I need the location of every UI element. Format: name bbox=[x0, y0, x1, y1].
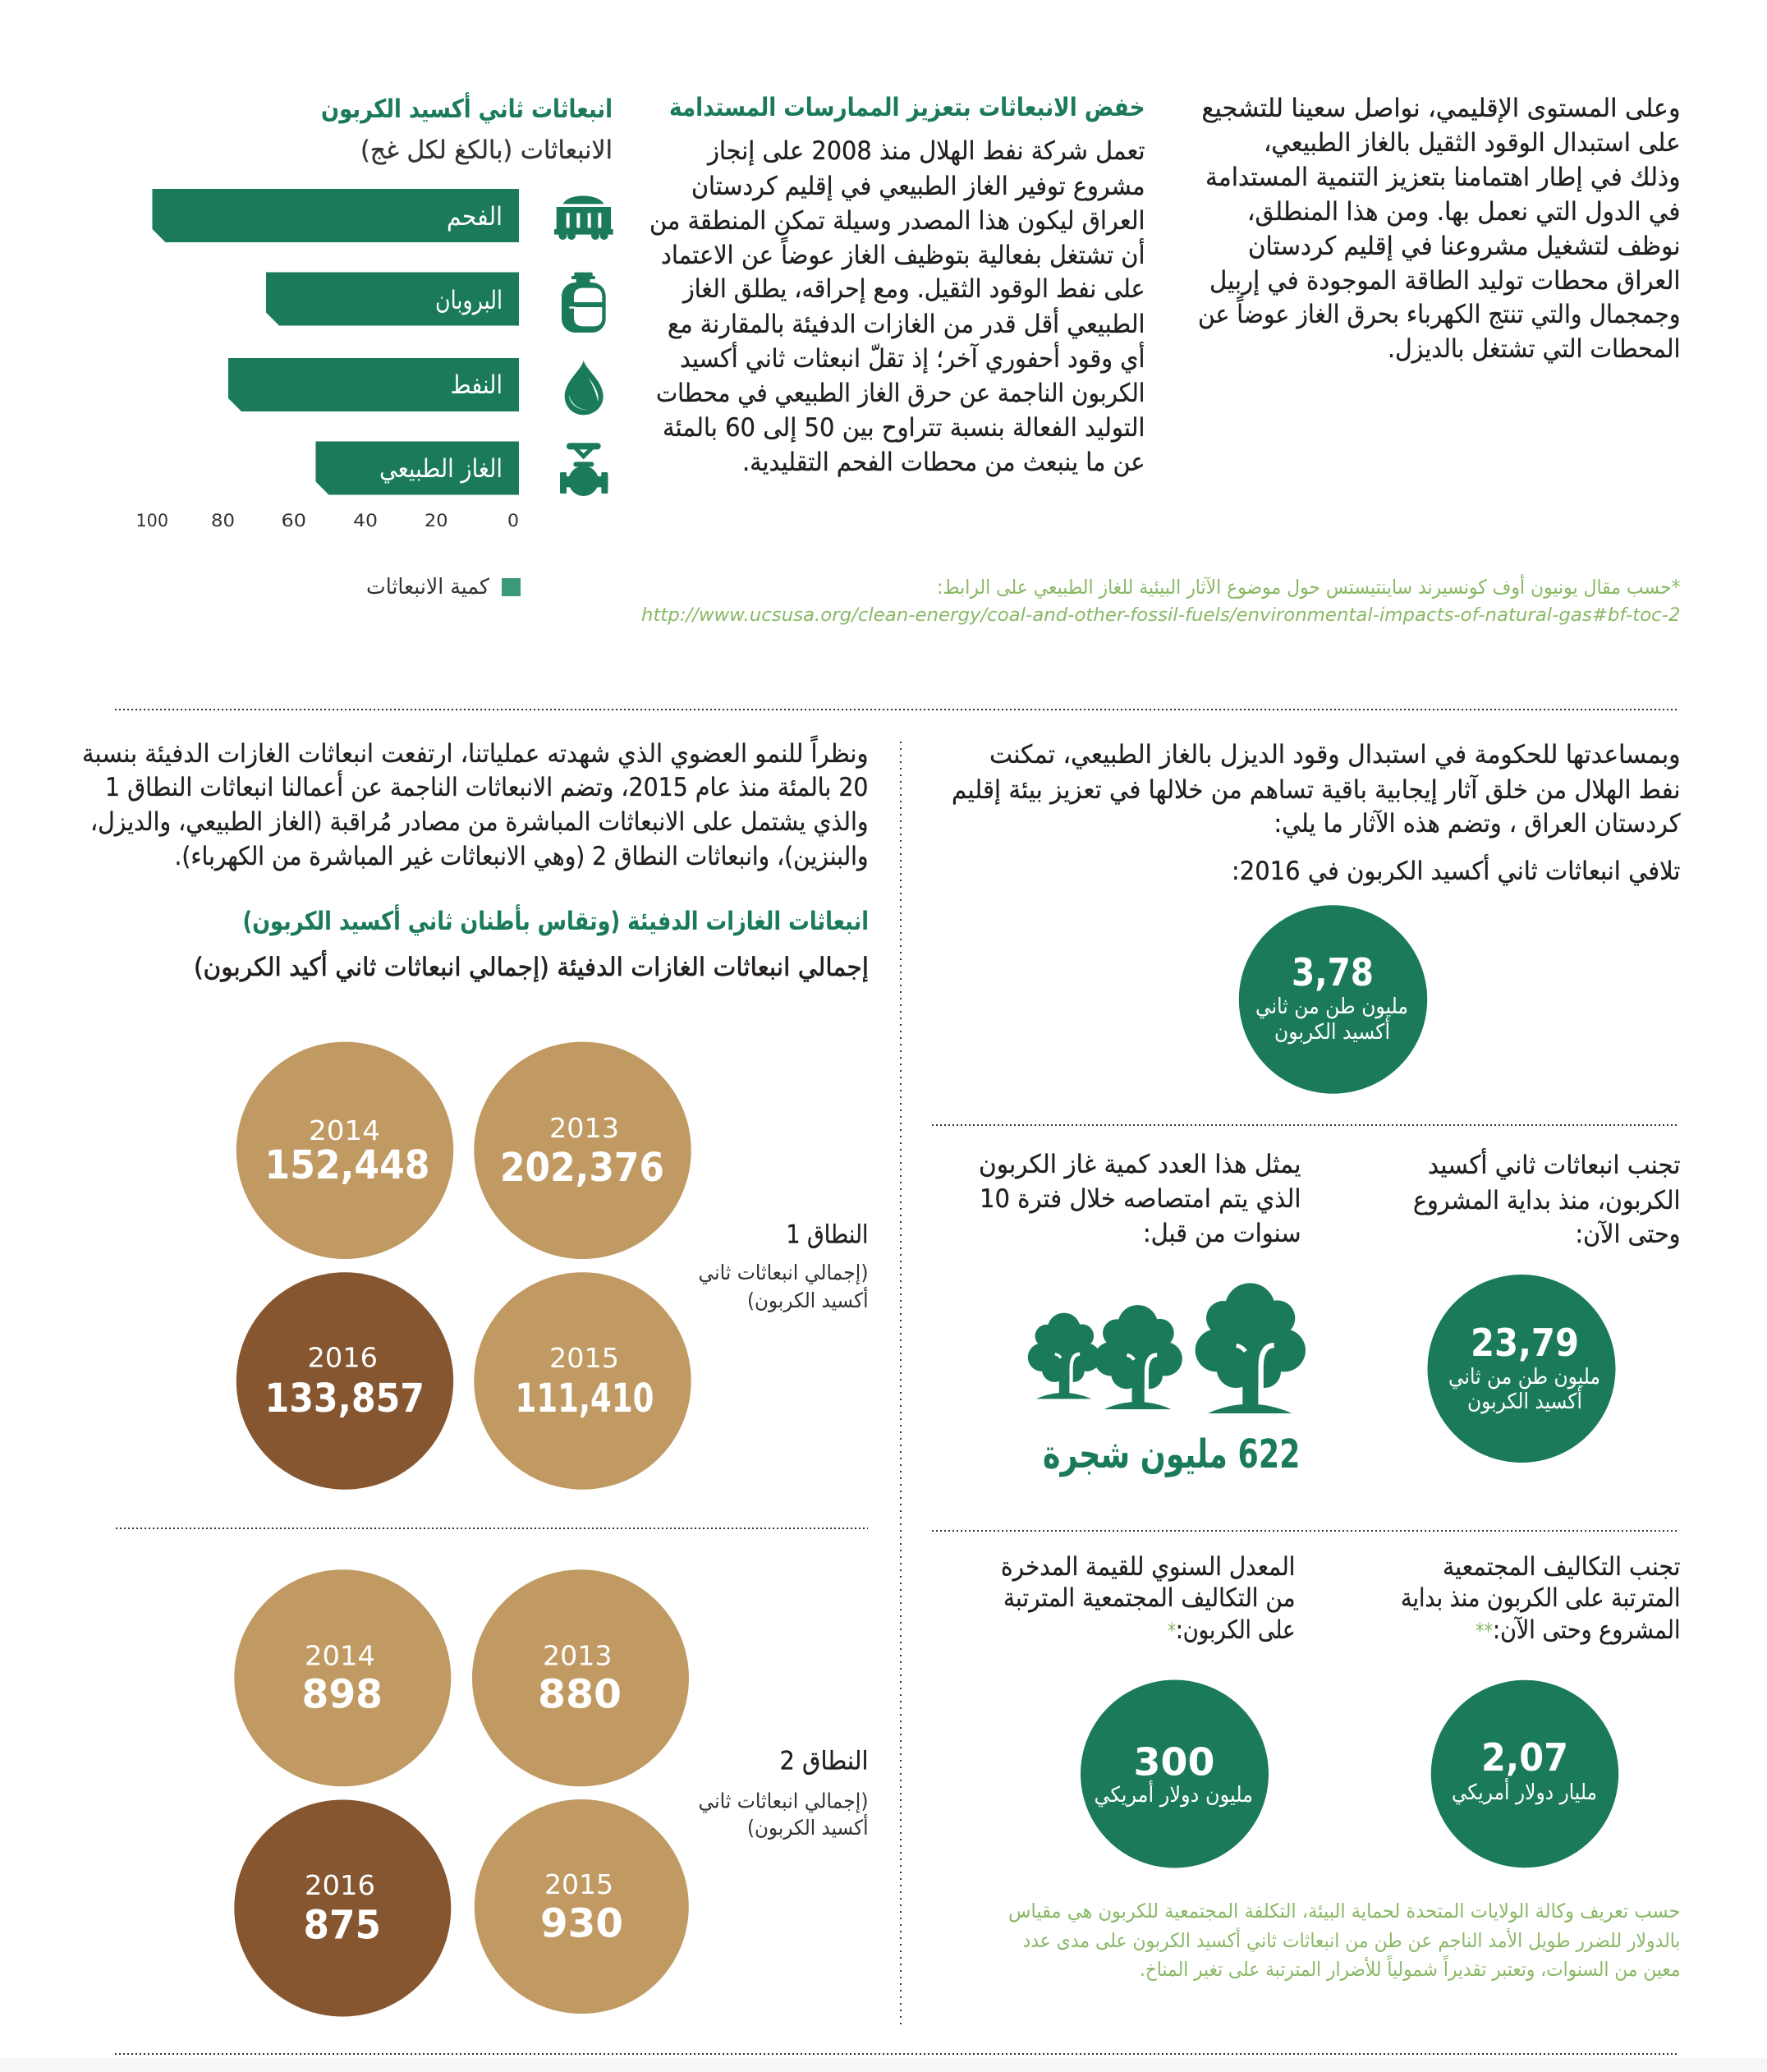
stat circle: 2.07: 2,07 bbox=[1481, 1735, 1568, 1780]
circle: 2014 scope 1: 2014 bbox=[309, 1114, 380, 1146]
text block: avoided social cost: المترتبة على الكربون منذ بداية bbox=[1401, 1583, 1680, 1613]
circle: 2013 scope 1: 202,376 bbox=[500, 1145, 664, 1191]
text block: avoided social cost: ** bbox=[1476, 1619, 1493, 1644]
axis labels bbox=[136, 511, 519, 531]
icon: propane tank bbox=[562, 273, 606, 333]
text block: intro to positive impacts: تلافي انبعاثات ثاني أكسيد الكربون في 2016: bbox=[1232, 854, 1681, 886]
text block: organic growth paragraph: 20 بالمئة منذ عام 2015، وتضم الانبعاثات الناجمة عن أعمالنا انبعاثات النطاق 1 bbox=[105, 770, 869, 802]
bar: oil: النفط bbox=[450, 370, 503, 400]
axis labels: 80 bbox=[211, 511, 235, 531]
text block: tree equivalence: يمثل هذا العدد كمية غاز الكربون bbox=[979, 1150, 1301, 1179]
text block: natural gas project paragraph bbox=[649, 136, 1145, 477]
subheading: total emissions: إجمالي انبعاثات الغازات الدفيئة (إجمالي انبعاثات ثاني أكيد الكربون) bbox=[194, 950, 869, 982]
text block: avoided social cost: تجنب التكاليف المجتمعية bbox=[1443, 1552, 1680, 1582]
stat circle: 3.78: أكسيد الكربون bbox=[1274, 1017, 1390, 1045]
bar: coal: الفحم bbox=[447, 202, 503, 232]
text block: regional paragraph: وجمجمال والتي تنتج الكهرباء بحرق الغاز عوضاً عن bbox=[1198, 296, 1680, 329]
text block: natural gas project paragraph: أن تشتغل بفعالية بتوظيف الغاز عوضاً عن الاعتماد bbox=[661, 237, 1145, 270]
text block: natural gas project paragraph: العراق ليكون هذا المصدر وسيلة تمكن المنطقة من bbox=[649, 206, 1145, 236]
text block: natural gas project paragraph: على نفط الوقود الثقيل. ومع إحراقه، يطلق الغاز bbox=[682, 274, 1145, 304]
circle: 2014 scope 2: 898 bbox=[302, 1672, 383, 1718]
circle: 2013 scope 2: 880 bbox=[538, 1672, 622, 1718]
text block: avoided CO2 since start: الكربون، منذ بداية المشروع bbox=[1413, 1186, 1680, 1215]
label: scope 2: (إجمالي انبعاثات ثاني bbox=[698, 1789, 869, 1813]
text block: organic growth paragraph: والذي يشتمل على الانبعاثات المباشرة من مصادر مُراقبة (الغاز الطبيعي، والديزل، bbox=[90, 807, 869, 837]
icon: trees bbox=[1028, 1283, 1306, 1413]
text block: regional paragraph: العراق محطات توليد الطاقة الموجودة في إربيل bbox=[1209, 266, 1680, 296]
text block: natural gas project paragraph: تعمل شركة نفط الهلال منذ 2008 على إنجاز bbox=[706, 136, 1145, 166]
stat circle: 23.79: مليون طن من ثاني bbox=[1448, 1365, 1600, 1390]
footnote: social cost definition bbox=[1008, 1900, 1680, 1981]
icon: gas valve bbox=[560, 443, 608, 496]
circle: 2014 scope 1 bbox=[236, 1042, 453, 1259]
text block: avoided CO2 since start: تجنب انبعاثات ثاني أكسيد bbox=[1428, 1148, 1680, 1180]
text block: annual social cost saving: على الكربون: bbox=[1176, 1615, 1296, 1645]
circle: 2016 scope 2 bbox=[234, 1800, 451, 2017]
text block: natural gas project paragraph: أي وقود أحفوري آخر؛ إذ تقلّ انبعثات ثاني أكسيد bbox=[680, 342, 1145, 374]
circle: 2016 scope 1: 2016 bbox=[307, 1342, 378, 1373]
stat circle: 300: مليون دولار أمريكي bbox=[1094, 1780, 1253, 1808]
icon: oil drop bbox=[565, 360, 604, 415]
circle: 2013 scope 2: 2013 bbox=[543, 1639, 613, 1672]
text block: intro to positive impacts: نفط الهلال من خلق آثار إيجابية باقية تساهم من خلالها في تعزيز بيئة إقليم bbox=[952, 774, 1680, 805]
stat circle: 300 bbox=[1081, 1680, 1269, 1868]
stat circle: 2.07 bbox=[1431, 1680, 1618, 1868]
stat: 622 million trees: 622 مليون شجرة bbox=[1043, 1431, 1301, 1477]
text block: regional paragraph: في الدول التي نعمل بها. ومن هذا المنطلق، bbox=[1247, 197, 1680, 227]
bar: natural gas: الغاز الطبيعي bbox=[379, 454, 503, 484]
icon: coal cart bbox=[554, 195, 613, 240]
text block: natural gas project paragraph: الطبيعي أقل قدر من الغازات الدفيئة بالمقارنة مع bbox=[668, 307, 1145, 339]
text block: avoided CO2 since start bbox=[1413, 1148, 1680, 1249]
circle: 2016 scope 2: 875 bbox=[304, 1902, 381, 1948]
axis labels: 100 bbox=[136, 511, 168, 531]
panel: scope 2 circles bbox=[234, 1569, 689, 2017]
text block: regional paragraph: نوظف لتشغيل مشروعنا في إقليم كردستان bbox=[1248, 232, 1680, 261]
label: scope 2 bbox=[698, 1746, 869, 1840]
text block: organic growth paragraph bbox=[82, 735, 869, 871]
footnote: source link bbox=[641, 574, 1680, 626]
circle: 2015 scope 1 bbox=[474, 1272, 691, 1490]
legend: كمية الانبعاثات bbox=[366, 575, 490, 600]
text block: intro to positive impacts bbox=[952, 740, 1681, 886]
heading: CO2 emissions chart bbox=[321, 92, 613, 165]
circle: 2016 scope 1: 133,857 bbox=[264, 1376, 425, 1422]
stat circle: 23.79 bbox=[1427, 1275, 1616, 1463]
text block: organic growth paragraph: ونظراً للنمو العضوي الذي شهدته عملياتنا، ارتفعت انبعاثات الغازات الدفيئة بنسبة bbox=[82, 735, 869, 769]
icon: large tree bbox=[1196, 1283, 1306, 1413]
text block: regional paragraph bbox=[1198, 94, 1680, 364]
circle: 2014 scope 2: 2014 bbox=[305, 1639, 375, 1672]
footnote: social cost definition: معين من السنوات، وتعتبر تقديراً شمولياً للأضرار المترتبة على تغير المناخ. bbox=[1140, 1955, 1680, 1981]
text block: regional paragraph: وعلى المستوى الإقليمي، نواصل سعينا للتشجيع bbox=[1202, 94, 1680, 123]
stat circle: 3.78: 3,78 bbox=[1292, 950, 1374, 995]
label: scope 2: أكسيد الكربون) bbox=[747, 1813, 869, 1840]
bar: oil bbox=[228, 358, 519, 411]
circle: 2015 scope 1: 2015 bbox=[549, 1342, 619, 1374]
text block: intro to positive impacts: وبمساعدتها للحكومة في استبدال وقود الديزل بالغاز الطبيعي، تمكنت bbox=[989, 740, 1680, 770]
text block: intro to positive impacts: كردستان العراق ، وتضم هذه الآثار ما يلي: bbox=[1274, 809, 1681, 838]
footnote: source link: http://www.ucsusa.org/clean-energy/coal-and-other-fossil-fuels/environmental-impacts-of-natural-gas#bf-toc-2 bbox=[641, 605, 1680, 626]
text block: natural gas project paragraph: التوليد الفعالة بنسبة تتراوح بين 50 إلى 60 بالمئة bbox=[663, 413, 1145, 443]
axis labels: 0 bbox=[507, 511, 519, 531]
label: scope 1: النطاق 1 bbox=[787, 1220, 869, 1250]
heading: reducing emissions: خفض الانبعاثات بتعزيز الممارسات المستدامة bbox=[669, 93, 1145, 122]
bar: natural gas bbox=[315, 442, 519, 494]
circle: 2014 scope 2 bbox=[234, 1569, 451, 1786]
axis labels: 40 bbox=[353, 511, 378, 531]
text block: annual social cost saving: المعدل السنوي للقيمة المدخرة bbox=[1001, 1552, 1296, 1582]
circle: 2015 scope 2: 930 bbox=[540, 1900, 623, 1946]
text block: natural gas project paragraph: مشروع توفير الغاز الطبيعي في إقليم كردستان bbox=[691, 172, 1145, 201]
text block: annual social cost saving bbox=[1001, 1552, 1296, 1645]
circle: 2015 scope 2: 2015 bbox=[544, 1868, 613, 1900]
label: scope 1: أكسيد الكربون) bbox=[747, 1286, 869, 1312]
footnote: social cost definition: حسب تعريف وكالة الولايات المتحدة لحماية البيئة، التكلفة المجتمعية للكربون هي مقياس bbox=[1008, 1900, 1680, 1923]
label: scope 1 bbox=[698, 1220, 869, 1312]
text block: tree equivalence: الذي يتم امتصاصه خلال فترة 10 bbox=[980, 1184, 1301, 1214]
label: scope 2: النطاق 2 bbox=[780, 1746, 869, 1776]
circle: 2016 scope 2: 2016 bbox=[305, 1869, 375, 1901]
circle: 2013 scope 1: 2013 bbox=[549, 1112, 619, 1144]
text block: regional paragraph: على استبدال الوقود الثقيل بالغاز الطبيعي، bbox=[1264, 128, 1680, 158]
text block: natural gas project paragraph: عن ما ينبعث من محطات الفحم التقليدية. bbox=[742, 448, 1145, 477]
text block: regional paragraph: المحطات التي تشتغل بالديزل. bbox=[1388, 334, 1680, 364]
stat circle: 23.79: أكسيد الكربون bbox=[1467, 1386, 1582, 1414]
stat circle: 300: 300 bbox=[1133, 1739, 1215, 1784]
footnote: source link: *حسب مقال يونيون أوف كونسيرند ساينتيستس حول موضوع الآثار البيئية للغاز الطبيعي على الرابط: bbox=[937, 574, 1680, 599]
text block: natural gas project paragraph: الكربون الناجمة عن حرق الغاز الطبيعي في محطات bbox=[656, 379, 1145, 408]
icon: small tree bbox=[1028, 1313, 1100, 1399]
heading: greenhouse gas emissions: انبعاثات الغازات الدفيئة (وتقاس بأطنان ثاني أكسيد الكربون) bbox=[243, 904, 869, 936]
circle: 2013 scope 1 bbox=[474, 1042, 691, 1259]
bar: coal bbox=[153, 189, 519, 242]
heading: CO2 emissions chart: انبعاثات ثاني أكسيد الكربون bbox=[321, 92, 613, 124]
text block: tree equivalence: سنوات من قبل: bbox=[1143, 1219, 1301, 1248]
label: scope 1: (إجمالي انبعاثات ثاني bbox=[698, 1261, 869, 1285]
axis labels: 60 bbox=[281, 511, 306, 531]
bar: propane bbox=[266, 273, 519, 325]
circle: 2013 scope 2 bbox=[472, 1569, 689, 1786]
bar chart: emissions by fuel bbox=[136, 189, 519, 531]
bar: propane: البروبان bbox=[435, 286, 503, 315]
circle: 2015 scope 2 bbox=[475, 1799, 689, 2014]
stat circle: 3.78: مليون طن من ثاني bbox=[1255, 995, 1408, 1019]
text block: avoided social cost bbox=[1401, 1552, 1680, 1645]
text block: organic growth paragraph: والبنزين)، وانبعاثات النطاق 2 (وهي الانبعاثات غير المباشرة من الكهرباء). bbox=[174, 842, 869, 871]
text block: tree equivalence bbox=[979, 1150, 1301, 1248]
axis labels: 20 bbox=[425, 511, 448, 531]
text block: annual social cost saving: من التكاليف المجتمعية المترتبة bbox=[1003, 1583, 1296, 1613]
icon: medium tree bbox=[1094, 1305, 1182, 1409]
circle: 2014 scope 1: 152,448 bbox=[264, 1142, 430, 1188]
circle: 2016 scope 1 bbox=[236, 1272, 453, 1490]
stat circle: 23.79: 23,79 bbox=[1471, 1321, 1579, 1365]
text block: regional paragraph: وذلك في إطار اهتمامنا بتعزيز التنمية المستدامة bbox=[1205, 163, 1680, 192]
heading: CO2 emissions chart: الانبعاثات (بالكغ لكل غج) bbox=[360, 136, 613, 165]
text block: avoided social cost: المشروع وحتى الآن: bbox=[1493, 1615, 1680, 1645]
footnote: social cost definition: بالدولار للضرر طويل الأمد الناجم عن طن من انبعاثات ثاني أكسيد الكربون على مدى عدد bbox=[1023, 1927, 1680, 1952]
stat circle: 3.78 bbox=[1239, 905, 1427, 1094]
panel: scope 1 circles bbox=[236, 1042, 691, 1490]
circle: 2015 scope 1: 111,410 bbox=[516, 1376, 654, 1422]
text block: annual social cost saving: * bbox=[1168, 1619, 1176, 1644]
text block: avoided CO2 since start: وحتى الآن: bbox=[1575, 1220, 1680, 1249]
stat circle: 2.07: مليار دولار أمريكي bbox=[1452, 1777, 1597, 1805]
